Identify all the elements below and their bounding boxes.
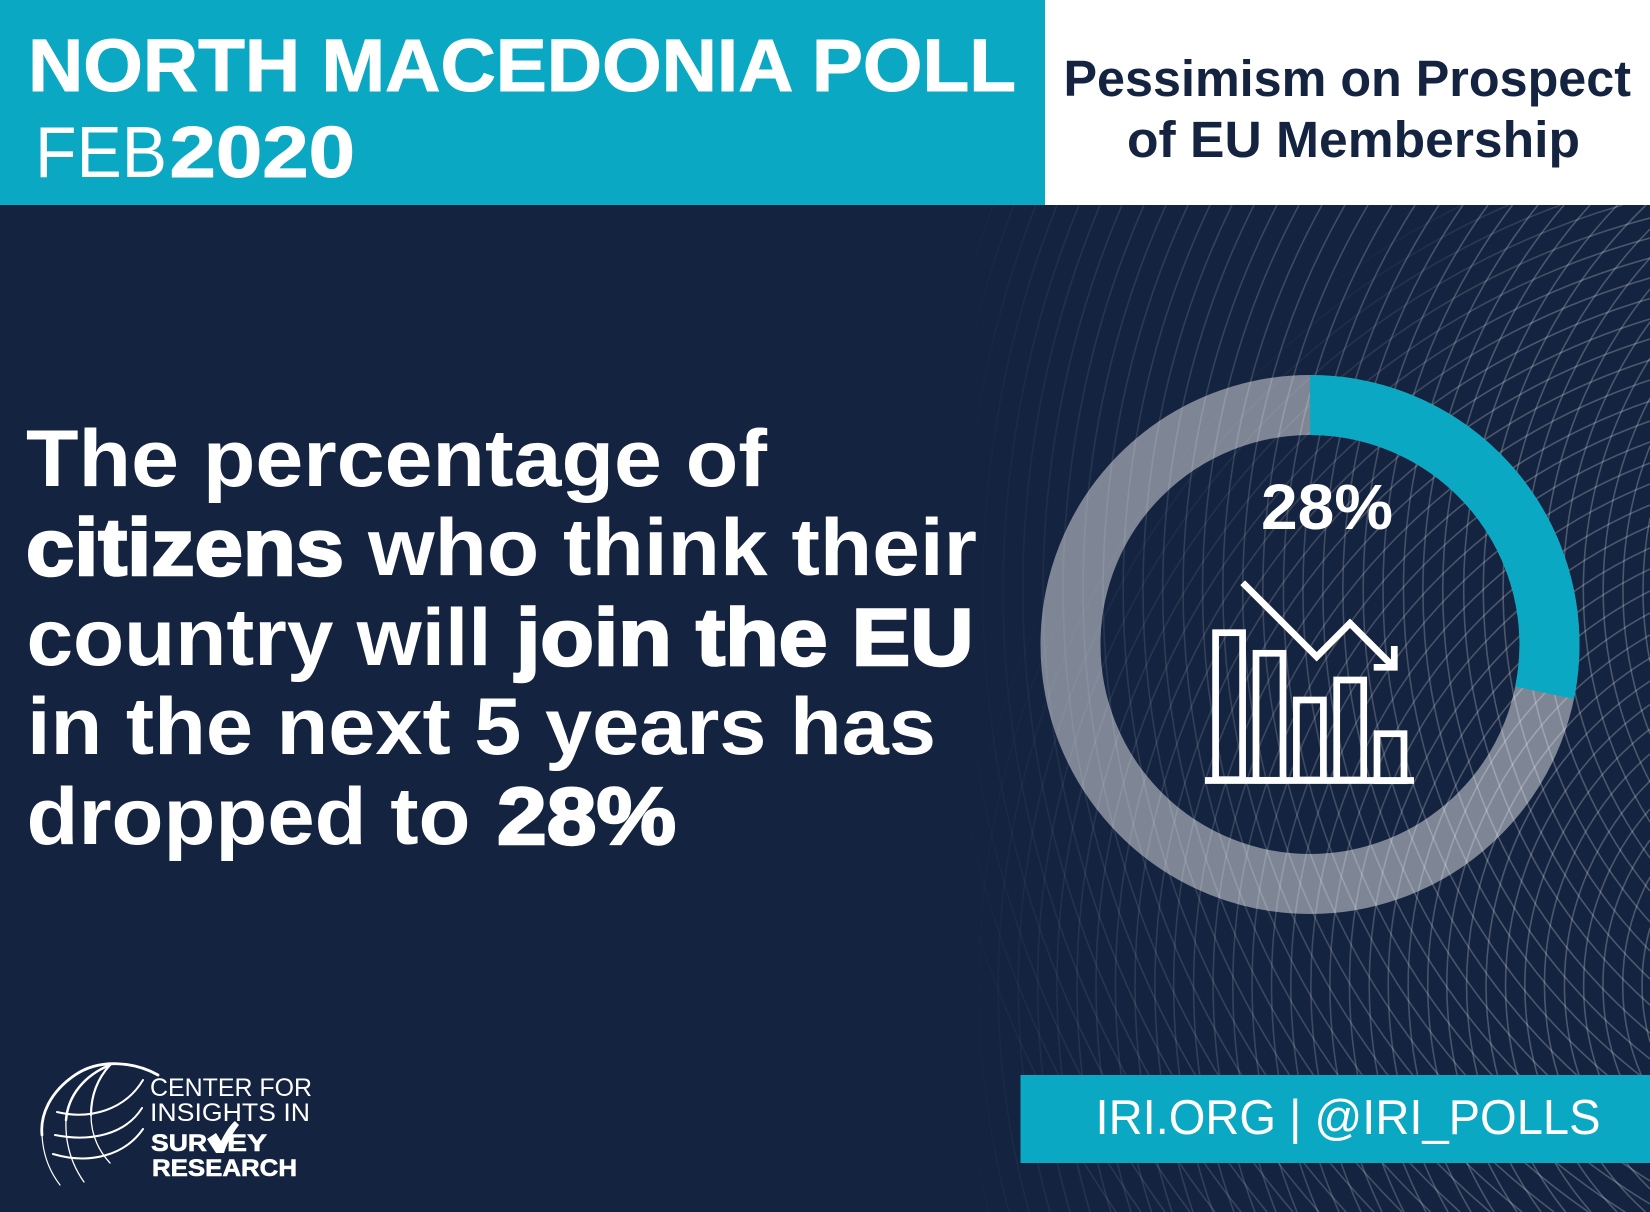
footer bar: website and handle	[1020, 1075, 1650, 1163]
logo globe	[42, 1064, 158, 1185]
logo wordmark: RESEARCH	[152, 1155, 297, 1182]
logo wordmark	[150, 1074, 312, 1182]
main statement: country will	[26, 593, 492, 683]
main statement: The percentage of	[26, 414, 768, 504]
icon: declining bar chart with arrow	[1205, 583, 1414, 781]
donut value label: 28%	[1261, 471, 1393, 543]
header panel: topic	[1045, 0, 1650, 205]
date: Feb: FEB	[35, 113, 167, 193]
donut chart: 28%	[1070, 375, 1579, 884]
topic line 1: Pessimism on Prospect	[1064, 50, 1631, 107]
logo wordmark: INSIGHTS IN	[150, 1099, 310, 1127]
main statement: who think their	[367, 503, 977, 593]
logo check mark	[207, 1121, 239, 1153]
header panel: poll title	[0, 0, 1045, 205]
donut segment: 28% teal	[1310, 375, 1579, 699]
logo wordmark: CENTER FOR	[150, 1074, 312, 1102]
main statement: 28%	[497, 772, 676, 862]
logo: Center for Insights in Survey Research	[42, 1064, 312, 1185]
logo wordmark: SUR	[151, 1130, 207, 1157]
main statement: dropped to	[26, 772, 470, 862]
topic line 2: of EU Membership	[1127, 111, 1580, 168]
main statement	[26, 414, 977, 862]
main statement: citizens	[26, 503, 344, 593]
date: 2020: 2020	[170, 113, 355, 193]
main statement: join the EU	[514, 593, 974, 683]
main statement: in the next 5 years has	[27, 682, 936, 772]
title: North Macedonia Poll: NORTH MACEDONIA POLL	[28, 24, 1016, 107]
footer text: IRI.ORG | @IRI_POLLS	[1096, 1091, 1600, 1145]
logo wordmark: EY	[227, 1130, 267, 1157]
